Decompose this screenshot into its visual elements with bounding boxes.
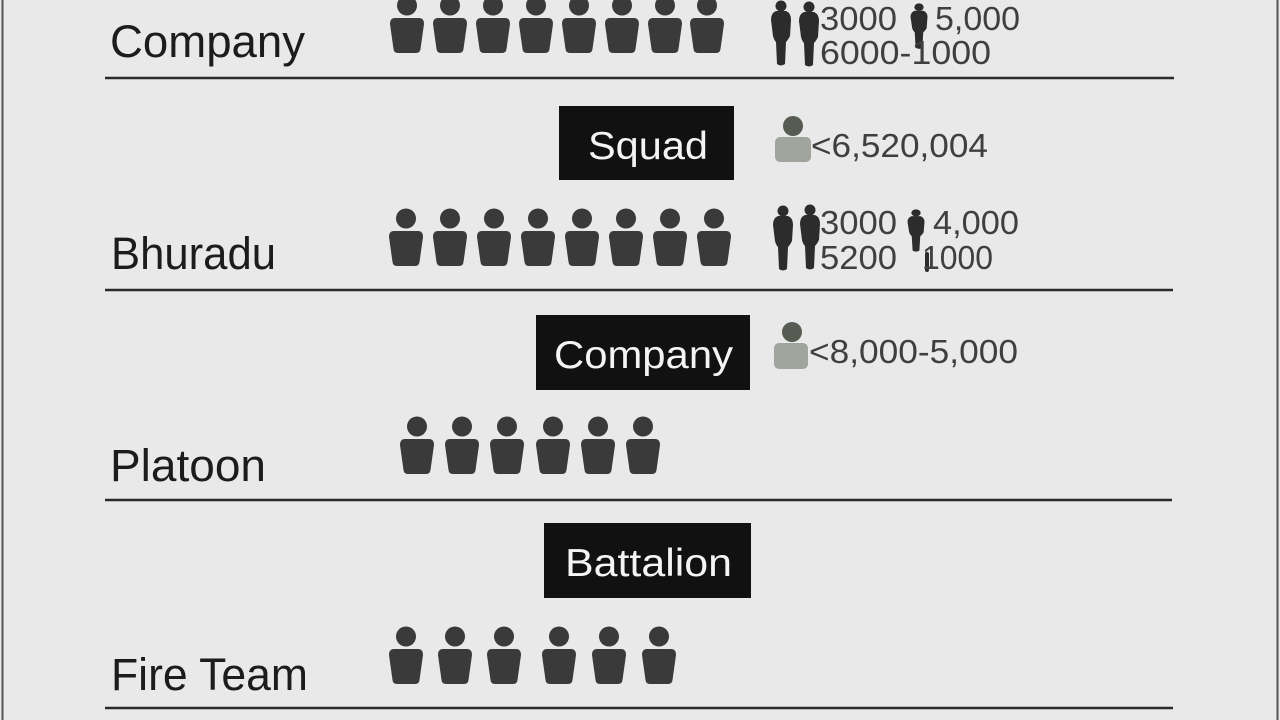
- tag: Company: [536, 315, 750, 390]
- numbers: Company strength: 3000: [820, 0, 897, 37]
- numbers: Bhuradu strength: 5200: [820, 239, 897, 276]
- tag: Company: Company: [554, 334, 734, 377]
- numbers: Company strength: 6000-1000: [820, 34, 991, 71]
- numbers: Bhuradu strength: 4,000: [933, 204, 1019, 241]
- number: company strength: <8,000-5,000: [809, 333, 1018, 370]
- tag: Battalion: [544, 523, 751, 598]
- tag: Squad: [559, 106, 734, 180]
- label: Fire Team: Fire Team: [111, 649, 308, 700]
- row: Fire Team: [111, 626, 676, 700]
- numbers: Bhuradu strength: 3000: [820, 204, 897, 241]
- icon row: 6 people: [400, 416, 660, 474]
- numbers: Bhuradu strength: 1000: [922, 239, 993, 276]
- icon: gray person: [774, 322, 808, 369]
- row: Company: [110, 0, 1020, 71]
- icon: gray person: [775, 116, 811, 162]
- icon row: 8 people: [389, 208, 731, 266]
- icon row: 8 people: [390, 0, 724, 53]
- number: squad strength: <6,520,004: [811, 127, 988, 164]
- numbers: Bhuradu strength: [820, 204, 1019, 276]
- icons: standing figures: [773, 204, 929, 272]
- tag: Squad: Squad: [588, 125, 708, 168]
- row: Bhuradu: [111, 204, 1019, 279]
- numbers: Company strength: 5,000: [935, 0, 1020, 37]
- tag: Battalion: Battalion: [565, 542, 732, 585]
- label: Bhuradu: Bhuradu: [111, 228, 276, 279]
- label: Company: Company: [110, 16, 306, 67]
- icons: standing figures: [771, 0, 928, 66]
- numbers: Company strength: [820, 0, 1020, 71]
- icon row: 6 people: [389, 626, 676, 684]
- row: Platoon: [110, 416, 660, 491]
- label: Platoon: Platoon: [110, 440, 266, 491]
